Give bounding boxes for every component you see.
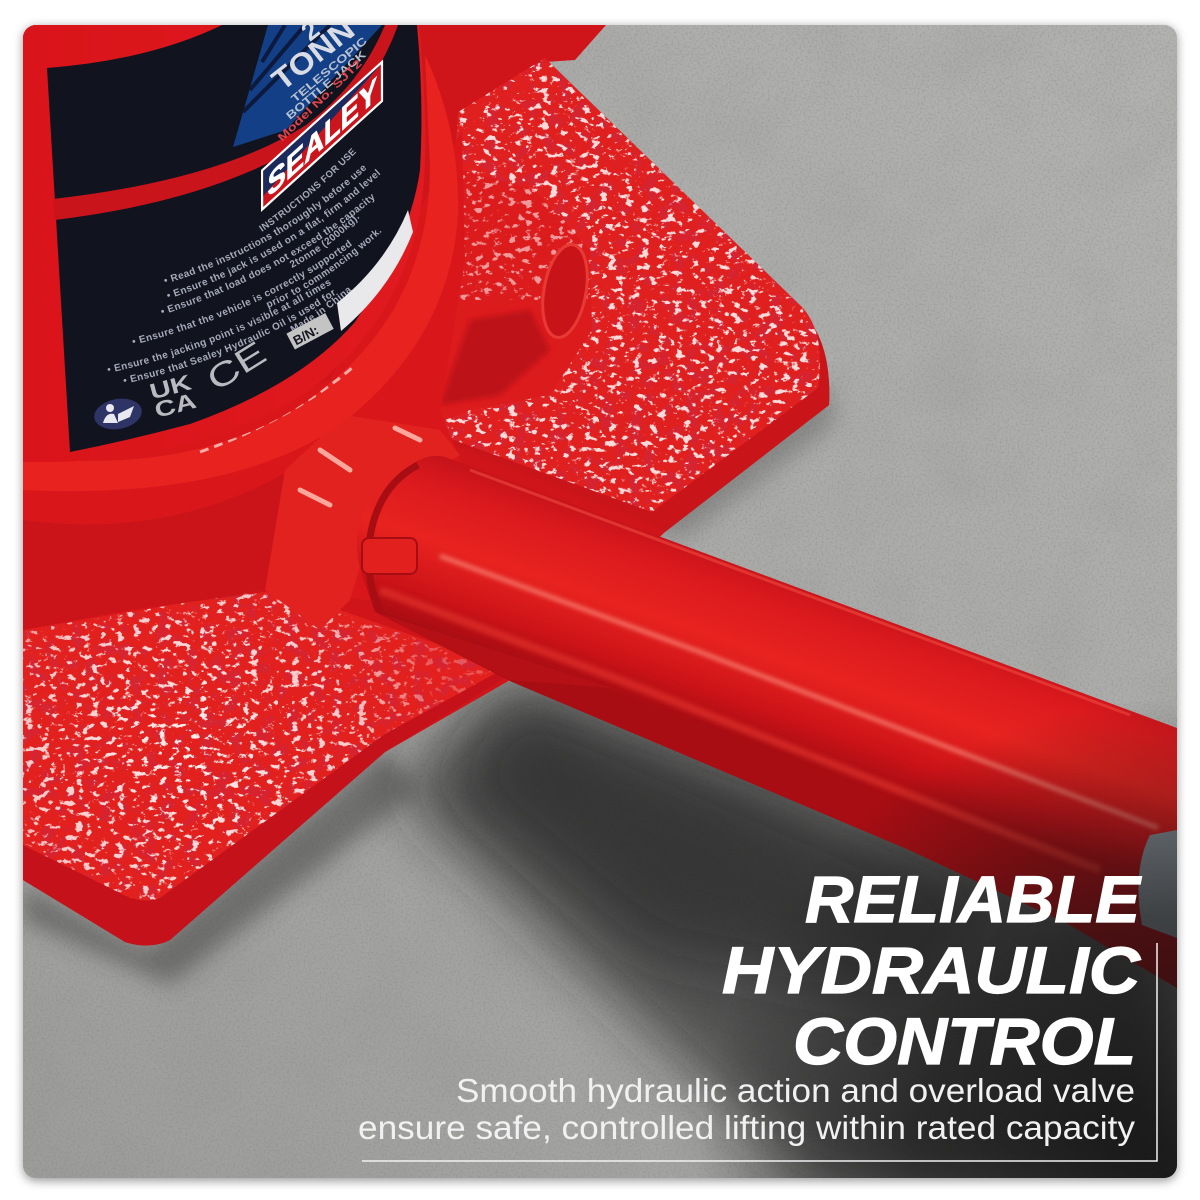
tube lower reflection	[380, 590, 1100, 870]
retaining pin	[362, 538, 417, 574]
sealey logo: SEALEY	[268, 69, 377, 205]
label model: Model No. SJT2	[276, 58, 365, 144]
instruction text: • Ensure that load does not exceed the capacity	[161, 194, 374, 313]
lower base plate	[23, 575, 513, 946]
label subtitle: TELESCOPIC	[289, 35, 370, 105]
tube socket	[265, 415, 460, 630]
upper plate shadow	[640, 380, 835, 540]
handle core shadow	[450, 690, 1000, 1000]
base casting underlay	[23, 25, 829, 946]
batch number white strip	[337, 210, 413, 331]
heading: RELIABLE	[805, 862, 1142, 936]
heading: CONTROL	[793, 1004, 1136, 1078]
label title: TONN	[266, 13, 361, 98]
instruction text: • Ensure that the vehicle is correctly supported	[132, 240, 352, 343]
instruction text: Made in China	[290, 288, 352, 330]
tube highlight streak	[440, 556, 1158, 828]
handle tube	[357, 456, 1177, 988]
UKCA mark: UK	[147, 369, 194, 404]
instruction text: • Ensure the jack is used on a flat, firm and level	[167, 169, 380, 297]
tube end ring	[368, 465, 418, 610]
manual icon	[92, 395, 144, 433]
batch number box	[286, 313, 334, 350]
upper base plate	[430, 50, 840, 540]
CE mark: CE	[200, 334, 272, 398]
grey rubber grip	[1138, 830, 1177, 938]
instruction text: prior to commencing work.	[266, 230, 382, 310]
handle cast shadow	[395, 680, 1180, 1190]
product label	[47, 25, 422, 452]
heading	[722, 862, 1142, 1078]
UKCA mark	[150, 374, 197, 416]
label capacity digit: 2	[295, 14, 325, 47]
instruction text: INSTRUCTIONS FOR USE	[258, 148, 356, 232]
text background shade	[690, 690, 1180, 1180]
label blue swoosh	[233, 25, 382, 147]
UKCA mark: CA	[152, 388, 199, 423]
tube sleeve barb	[375, 612, 612, 688]
instruction text: • Ensure the jacking point is visible at all times	[108, 280, 331, 372]
instruction text: 2tonne (2000kg).	[290, 216, 360, 268]
frame lines	[362, 943, 1157, 1161]
label red stripe	[53, 25, 398, 220]
socket highlights	[300, 428, 420, 505]
instruction text: • Read the instructions thoroughly before use	[164, 166, 366, 282]
hub shaded flank	[23, 470, 290, 630]
label subtitle two: BOTTLE JACK	[284, 49, 369, 122]
sealey logo	[261, 59, 383, 212]
supporting text: Smooth hydraulic action and overload valve	[456, 1072, 1135, 1109]
supporting text	[358, 1072, 1136, 1146]
hydraulic valve boss	[440, 172, 592, 420]
base plate shadow	[23, 750, 420, 985]
instruction text: • Ensure that Sealey Hydraulic Oil is used for	[124, 290, 335, 382]
collar ring	[23, 55, 458, 491]
hub casting	[23, 130, 465, 630]
supporting text: ensure safe, controlled lifting within rated capacity	[358, 1109, 1136, 1146]
cylinder body	[23, 25, 425, 462]
tube top edge highlight	[470, 470, 1130, 715]
instruction text	[108, 148, 382, 382]
label background	[47, 25, 421, 452]
heading: HYDRAULIC	[722, 933, 1141, 1007]
batch number box: B/N:	[290, 322, 321, 348]
